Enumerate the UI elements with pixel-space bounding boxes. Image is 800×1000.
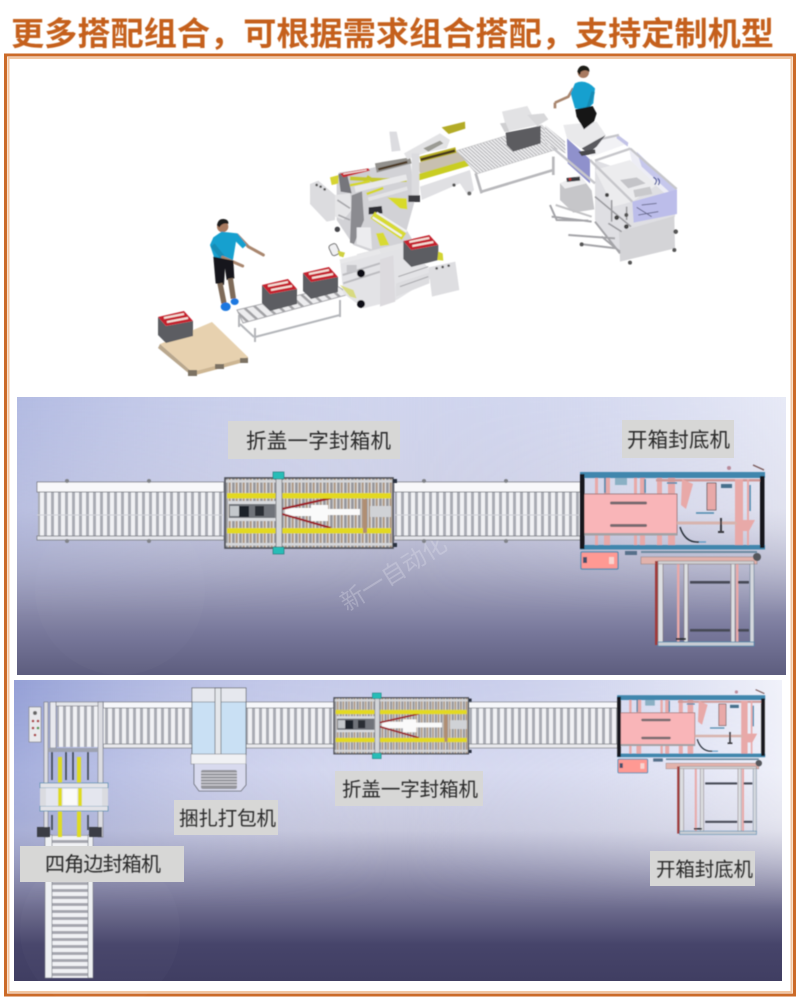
four-corner edge sealer [29, 702, 108, 837]
label: four-corner sealer [20, 846, 184, 882]
open carton on conveyor [500, 106, 548, 152]
folder sealer machine scaled [334, 693, 472, 759]
label: strapping machine: 捆扎打包机 [179, 808, 276, 830]
operator left [210, 219, 263, 311]
box on conveyor 2 [303, 267, 338, 299]
panel background [17, 397, 786, 675]
label: four-corner sealer: 四角边封箱机 [45, 853, 161, 876]
lower roller conveyor [237, 286, 350, 342]
label: folder sealer: 折盖一字封箱机 [342, 779, 478, 801]
label: case opener [650, 851, 755, 886]
label: case opener: 开箱封底机 [656, 859, 753, 881]
watermark: 新一自动化 [336, 531, 452, 617]
pallet [158, 322, 248, 376]
panel: isometric 3D production line [158, 66, 678, 376]
upper roller conveyor [457, 125, 563, 193]
box on pallet [158, 311, 193, 343]
title: 更多搭配组合，可根据需求组合搭配，支持定制机型 [11, 16, 774, 52]
label: strapping machine [174, 800, 278, 835]
case opener machine scaled [617, 690, 765, 834]
panel: top-view layout, full line [14, 680, 782, 1000]
right conveyor [394, 479, 581, 543]
vertical outfeed conveyor [45, 835, 93, 978]
case opener isometric [545, 122, 678, 265]
label: case opener [622, 420, 734, 458]
panel background [14, 680, 782, 1000]
case opener machine [580, 465, 765, 646]
left conveyor [37, 479, 224, 543]
label: folder sealer [228, 421, 400, 459]
panel: top-view layout, folder sealer line [17, 397, 786, 675]
folder sealer and lower sealer machinery [310, 122, 474, 308]
horizontal conveyor [103, 702, 618, 748]
box on conveyor 1 [262, 279, 297, 311]
label: case opener: 开箱封底机 [627, 429, 730, 452]
folder sealer machine [225, 472, 397, 554]
strapping machine [191, 688, 246, 791]
label: folder sealer: 折盖一字封箱机 [246, 430, 392, 453]
operator right [555, 66, 597, 129]
label: folder sealer [335, 771, 483, 806]
